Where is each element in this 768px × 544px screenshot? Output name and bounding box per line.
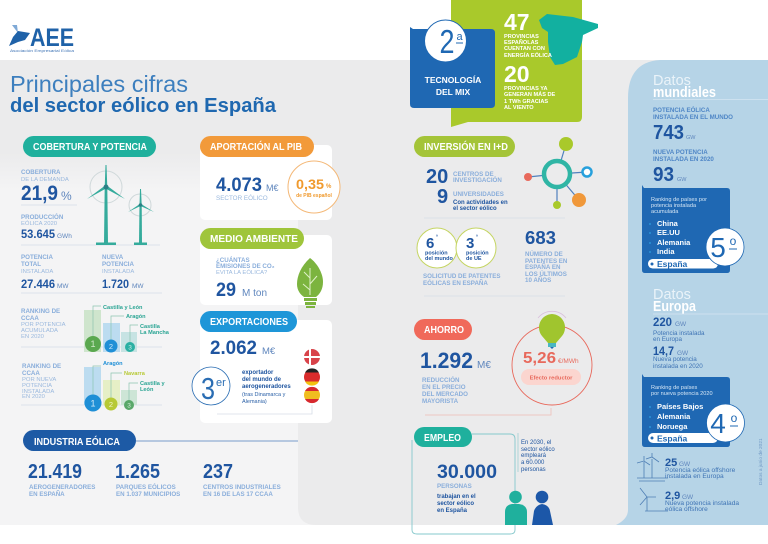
ranking: nueva potencia: EN 2020 (22, 394, 46, 400)
stat: universidades: UNIVERSIDADES (453, 191, 504, 198)
ranking box: nueva potencia (642, 374, 744, 447)
stat: 47 provincias: PROVINCIAS (504, 34, 539, 40)
ranking: nueva potencia: Navarra (124, 371, 146, 377)
text: previsión 2030: a 60.000 (521, 460, 545, 466)
logo: AEE (30, 24, 74, 52)
stat: patentes (525, 228, 568, 284)
heading pill: exportaciones: EXPORTACIONES (210, 316, 288, 328)
callout: 3ª posición de UE: de UE (466, 256, 482, 262)
callout: tercer exportador: (tras Dinamarca y (242, 392, 286, 398)
stat: potencia total instalada: TOTAL (21, 261, 41, 268)
stat: nueva potencia Europa: Nueva potencia (653, 356, 697, 363)
stat: emisiones evitadas: M ton (242, 288, 267, 299)
callout: 6ª posición del mundo: 6 (426, 235, 434, 252)
ranking: nueva potencia: Aragón (103, 361, 123, 367)
ranking box: nueva potencia: Noruega (657, 422, 688, 431)
callout: tercer exportador: exportador (242, 370, 274, 376)
panel: world and Europe data background (616, 60, 768, 525)
ranking box: potencia acumulada: Alemania (657, 238, 691, 247)
panel: industria eólica (23, 430, 298, 498)
heading pill: inversión en I+D (414, 136, 515, 157)
stat: cobertura de la demanda: 21,9 (21, 182, 58, 205)
icon: offshore turbine (640, 488, 668, 511)
icon: people (505, 491, 553, 525)
stat: nueva potencia Europa (653, 344, 703, 370)
stat: patentes: 10 AÑOS (525, 277, 551, 284)
stat: potencia total instalada (21, 254, 69, 291)
callout: tercer exportador: aerogeneradores (242, 384, 291, 390)
stat: potencia total instalada: 27.446 (21, 277, 55, 291)
stat: 47 provincias: ENERGÍA EÓLICA (504, 51, 552, 59)
callout: 3ª posición de UE: ª (476, 234, 478, 240)
ranking box: potencia acumulada: 5 (710, 232, 726, 263)
stat: potencia Europa (653, 315, 705, 343)
heading pill: medio ambiente: MEDIO AMBIENTE (210, 233, 298, 245)
ranking: potencia acumulada: 2 (109, 342, 113, 351)
stat: 47 provincias: 47 (504, 9, 530, 35)
ranking: potencia acumulada: EN 2020 (21, 334, 45, 340)
stat: nueva eólica offshore (665, 490, 739, 513)
callout: 6ª posición del mundo: ª (436, 234, 438, 240)
stat: centros de investigación (426, 166, 502, 188)
logo: Asociación Empresarial Eólica (10, 48, 75, 53)
icon: leaf bulb (297, 258, 323, 308)
stat: parques eólicos (115, 461, 180, 498)
ranking box: potencia acumulada: Ranking de países por (651, 197, 707, 203)
ranking box: potencia acumulada (642, 185, 744, 273)
stat: producción eólica: PRODUCCIÓN (21, 213, 64, 221)
text: solicitud de patentes: SOLICITUD DE PATENTES (423, 273, 500, 280)
text: previsión 2030 (518, 433, 555, 473)
ranking box: potencia acumulada: India (657, 247, 675, 256)
stat: nueva potencia instalada: 1.720 (102, 277, 129, 291)
stat: universidades: 9 (437, 186, 448, 208)
callout: 3ª posición de UE: 3 (466, 235, 474, 252)
stat: centros de investigación: CENTROS DE (453, 171, 494, 178)
panel: segunda tecnología del mix: TECNOLOGÍA (425, 75, 481, 85)
stat: parques eólicos: EN 1.037 MUNICIPIOS (116, 491, 180, 498)
ranking: nueva potencia: León (140, 387, 154, 393)
stat: reducción del precio: MAYORISTA (422, 398, 459, 405)
stat: sector eólico: M€ (266, 183, 279, 193)
card (200, 320, 332, 423)
ranking: potencia acumulada: La Mancha (140, 330, 170, 336)
stat: emisiones evitadas: 29 (216, 280, 236, 301)
stat: producción eólica: GWh (57, 233, 72, 240)
ranking: nueva potencia: RANKING DE (22, 363, 61, 370)
stat: sector eólico (216, 175, 279, 202)
heading: datos Europa (653, 287, 697, 315)
stat: universidades: Con actividades en (453, 200, 508, 206)
stat: reducción del precio: REDUCCIÓN (422, 376, 460, 384)
stat: nueva potencia instalada: MW (132, 283, 144, 290)
stat: cobertura de la demanda: % (61, 189, 72, 203)
stat: potencia Europa: GW (675, 321, 687, 328)
stat: potencia total instalada: MW (57, 283, 69, 290)
stat: eólica offshore: 25 (665, 457, 677, 469)
stat: centros industriales: 237 (203, 461, 233, 483)
stat: reducción del precio: M€ (477, 360, 491, 371)
text: solicitud de patentes (423, 273, 500, 287)
callout: porcentaje del PIB (288, 161, 340, 213)
stat: reducción del precio: 1.292 (420, 348, 473, 373)
card (200, 235, 332, 305)
stat: 20 provincias (504, 61, 556, 111)
stat: emisiones evitadas: ¿CUÁNTAS (216, 257, 250, 264)
stat: potencia mundial: 743 (653, 122, 684, 144)
callout: 6ª posición del mundo: del mundo (425, 256, 453, 262)
ranking: nueva potencia: 1 (90, 398, 96, 408)
panel: provincias (451, 0, 598, 127)
ranking: nueva potencia: Castilla y (140, 381, 165, 387)
ranking box: nueva potencia: por nueva potencia 2020 (651, 391, 713, 397)
text: previsión 2030: personas (521, 467, 546, 473)
ranking box: potencia acumulada: EE.UU (657, 228, 680, 237)
stat: 20 provincias: AL VIENTO (504, 105, 534, 111)
stat: centros industriales (203, 461, 281, 498)
stat: patentes: ESPAÑA EN (525, 264, 561, 271)
stat: parques eólicos: 1.265 (115, 461, 160, 483)
ranking: potencia acumulada: 3 (128, 344, 132, 352)
heading pill: aportación al PIB: APORTACIÓN AL PIB (210, 140, 302, 153)
map: Spain (539, 14, 598, 65)
stat: reducción del precio: EN EL PRECIO (422, 384, 466, 391)
text: previsión 2030: sector eólico (521, 447, 555, 453)
stat: potencia total instalada: POTENCIA (21, 254, 54, 261)
ranking box: potencia acumulada: China (657, 219, 679, 228)
heading pill: inversión en I+D: INVERSIÓN EN I+D (424, 140, 508, 153)
callout: porcentaje del PIB: % (326, 184, 332, 190)
title: del sector eólico en España (10, 94, 277, 117)
ranking box: nueva potencia: 4 (710, 408, 726, 439)
ranking: nueva potencia: INSTALADA (22, 389, 54, 395)
stat: nueva eólica offshore: GW (682, 494, 694, 501)
callout: 6ª posición del mundo (417, 228, 457, 268)
ranking: potencia acumulada (21, 305, 170, 352)
stat: sector eólico: 4.073 (216, 175, 262, 196)
ranking: potencia acumulada: RANKING DE (21, 308, 60, 315)
ranking box: nueva potencia: España (657, 434, 688, 444)
ranking: nueva potencia: POTENCIA (22, 383, 52, 389)
heading pill: ahorro: AHORRO (424, 324, 464, 336)
stat: cobertura de la demanda: COBERTURA (21, 169, 61, 176)
heading pill: industria eólica: INDUSTRIA EÓLICA (34, 435, 120, 448)
stat: nueva potencia instalada: NUEVA (102, 254, 124, 261)
ranking: potencia acumulada: CCAA (21, 315, 39, 322)
stat: nueva eólica offshore: eólica offshore (665, 506, 708, 513)
callout: tercer exportador: del mundo de (242, 377, 282, 383)
heading: datos mundiales (653, 73, 716, 101)
stat: nueva eólica offshore: Nueva potencia instalada (665, 500, 739, 507)
heading pill: empleo (414, 427, 472, 447)
stat: potencia total instalada: INSTALADA (21, 269, 53, 275)
panel: inversión en I+D (414, 136, 592, 296)
stat: universidades: el sector eólico (453, 206, 497, 212)
callout: 3ª posición de UE: posición (466, 250, 489, 256)
heading: datos mundiales: mundiales (653, 85, 716, 101)
stat: 47 provincias: CUENTAN CON (504, 46, 545, 52)
panel: centre background (298, 60, 640, 525)
heading: datos Europa: Europa (653, 299, 697, 315)
panel: empleo (412, 427, 555, 534)
stat: aerogeneradores: EN ESPAÑA (29, 491, 65, 498)
stat: personas: sector eólico (437, 501, 474, 507)
callout: porcentaje del PIB: de PIB español (296, 193, 333, 199)
stat: emisiones evitadas (216, 257, 275, 301)
ranking: potencia acumulada: POR POTENCIA (21, 322, 66, 328)
note: fecha de datos: Datos a junio de 2021 (758, 438, 764, 485)
ranking box: nueva potencia: Ranking de países (651, 385, 698, 391)
panel: medio ambiente (200, 228, 332, 308)
ranking: potencia acumulada: Castilla y León (103, 305, 143, 311)
callout: efecto reductor (512, 325, 592, 405)
stat: 20 provincias: 20 (504, 61, 530, 87)
ranking box: potencia acumulada: potencia instalada (651, 203, 697, 209)
stat: centros industriales: EN 16 DE LAS 17 CCAA (203, 491, 273, 498)
stat: nueva potencia instalada: POTENCIA (102, 261, 135, 268)
logo (9, 24, 75, 53)
ranking box: potencia acumulada: España (657, 259, 688, 269)
text: solicitud de patentes: EÓLICAS EN ESPAÑA (423, 279, 488, 287)
stat: nueva potencia mundial: NUEVA POTENCIA (653, 149, 708, 156)
stat: emisiones evitadas: EMISIONES DE CO₂ (216, 263, 275, 270)
stat: nueva potencia Europa: 14,7 (653, 344, 674, 358)
heading: datos mundiales: Datos (653, 73, 691, 89)
stat: universidades (437, 186, 508, 212)
stat: 20 provincias: 1 TWh GRACIAS (504, 99, 548, 105)
stat: personas (437, 461, 497, 514)
stat: patentes: LOS ÚLTIMOS (525, 271, 567, 278)
ranking: nueva potencia: 2 (109, 400, 113, 409)
ranking: nueva potencia: CCAA (22, 370, 40, 377)
panel: datos mundiales (642, 73, 768, 273)
panel: segunda tecnología del mix (410, 20, 495, 108)
stat: producción eólica: EÓLICA 2020 (21, 220, 58, 227)
ranking: potencia acumulada: 1 (90, 339, 96, 349)
callout: 3ª posición de UE (456, 228, 496, 268)
icon: research network (524, 137, 592, 209)
stat: potencia mundial (653, 106, 733, 144)
panel: segunda tecnología del mix: DEL MIX (436, 87, 470, 97)
stat: eólica offshore (665, 457, 736, 480)
heading pill: cobertura y potencia: COBERTURA Y POTENCIA (33, 141, 147, 153)
ranking: nueva potencia: POR NUEVA (22, 377, 56, 383)
stat: nueva potencia instalada: INSTALADA (102, 269, 134, 275)
stat: centros de investigación: 20 (426, 166, 448, 188)
callout: efecto reductor: Efecto reductor (530, 376, 573, 382)
stat: eólica offshore: Potencia eólica offshore (665, 467, 736, 474)
stat: potencia mundial: GW (686, 135, 696, 141)
stat: nueva potencia Europa: instalada en 2020 (653, 363, 703, 370)
ranking box: nueva potencia: Alemania (657, 412, 691, 421)
icon: wind turbines (87, 165, 154, 245)
stat: patentes: 683 (525, 228, 556, 248)
ranking: nueva potencia: 3 (127, 402, 131, 410)
ranking: potencia acumulada: Aragón (126, 314, 146, 320)
stat: exportaciones: 2.062 (210, 338, 257, 359)
callout: porcentaje del PIB: 0,35 (296, 176, 324, 192)
stat: sector eólico: SECTOR EÓLICO (216, 193, 268, 202)
stat: cobertura de la demanda (21, 169, 72, 205)
stat: potencia Europa: en Europa (653, 336, 683, 343)
stat: reducción del precio: DEL MERCADO (422, 391, 468, 398)
stat: 20 provincias: GENERAN MÁS DE (504, 91, 556, 98)
stat: potencia mundial: INSTALADA EN EL MUNDO (653, 114, 733, 121)
panel: datos Europa (637, 287, 768, 513)
stat: potencia Europa: Potencia instalada (653, 330, 705, 337)
ranking box: nueva potencia: Países Bajos (657, 402, 703, 411)
stat: nueva potencia Europa: GW (677, 350, 689, 357)
stat: personas: PERSONAS (437, 483, 472, 490)
stat: exportaciones: M€ (262, 346, 276, 357)
ranking box: potencia acumulada: o (730, 234, 737, 248)
stat: nueva potencia mundial (653, 149, 714, 186)
stat: patentes: NÚMERO DE (525, 251, 563, 258)
icon: flags (304, 349, 320, 403)
stat: producción eólica: 53.645 (21, 227, 55, 241)
stat: eólica offshore: instalada en Europa (665, 473, 724, 480)
stat: eólica offshore: GW (679, 461, 691, 468)
stat: producción eólica (21, 213, 72, 241)
ranking box: nueva potencia: o (731, 411, 738, 425)
ranking: potencia acumulada: Castilla (140, 324, 161, 330)
panel: segunda tecnología del mix: 2 (440, 23, 454, 60)
stat: reducción del precio (420, 348, 491, 405)
title (10, 71, 277, 117)
stat: centros industriales: CENTROS INDUSTRIALES (203, 484, 281, 491)
title: Principales cifras (10, 71, 188, 97)
stat: personas: 30.000 (437, 461, 497, 483)
stat: 20 provincias: PROVINCIAS YA (504, 86, 548, 92)
stat: centros de investigación: INVESTIGACIÓN (453, 176, 502, 184)
stat: aerogeneradores (28, 461, 95, 498)
stat: patentes: PATENTES EN (525, 258, 568, 265)
callout: efecto reductor: €/MWh (558, 358, 579, 365)
panel: cobertura y potencia (21, 136, 170, 412)
panel: segunda tecnología del mix: a (456, 31, 463, 43)
heading pill: industria eólica (23, 430, 136, 451)
callout: tercer exportador: 3 (201, 371, 215, 406)
stat: nueva potencia mundial: INSTALADA EN 2020 (653, 156, 714, 163)
card (200, 145, 332, 220)
panel: exportaciones (192, 311, 332, 423)
ranking: potencia acumulada: ACUMULADA (21, 328, 58, 334)
stat: potencia Europa: 220 (653, 315, 672, 329)
stat: 47 provincias: ESPAÑOLAS (504, 39, 539, 46)
heading pill: ahorro (414, 319, 472, 340)
callout: tercer exportador: Alemania) (242, 399, 267, 405)
heading pill: empleo: EMPLEO (424, 432, 461, 444)
stat: aerogeneradores: 21.419 (28, 461, 82, 483)
callout: efecto reductor: 5,26 (523, 350, 556, 367)
stat: personas: trabajan en el (437, 494, 476, 500)
panel: ahorro (414, 311, 592, 415)
stat: nueva potencia mundial: GW (677, 177, 687, 183)
ranking: nueva potencia (21, 361, 165, 412)
heading pill: cobertura y potencia (23, 136, 156, 157)
text: previsión 2030: empleará (521, 453, 547, 459)
stat: emisiones evitadas: EVITA LA EÓLICA? (216, 269, 268, 276)
ranking box: potencia acumulada: acumulada (651, 209, 679, 215)
heading: datos Europa: Datos (653, 287, 691, 303)
stat: nueva potencia mundial: 93 (653, 164, 674, 186)
callout: tercer exportador (192, 367, 291, 406)
stat: nueva potencia instalada (102, 254, 144, 291)
stat: 47 provincias (504, 9, 552, 59)
callout: 6ª posición del mundo: posición (425, 250, 448, 256)
icon: light bulb (538, 311, 566, 349)
icon: offshore wind turbines (637, 453, 668, 481)
text: previsión 2030: En 2030, el (521, 440, 551, 446)
stat: aerogeneradores: AEROGENERADORES (29, 484, 95, 491)
stat: nueva eólica offshore: 2,9 (665, 490, 680, 502)
stat: personas: en España (437, 508, 468, 514)
stat: potencia mundial: POTENCIA EÓLICA (653, 106, 710, 114)
stat: cobertura de la demanda: DE LA DEMANDA (21, 177, 69, 183)
callout: tercer exportador: er (216, 377, 226, 389)
stat: parques eólicos: PARQUES EÓLICOS (116, 483, 176, 491)
panel: aportación al PIB (200, 136, 340, 220)
